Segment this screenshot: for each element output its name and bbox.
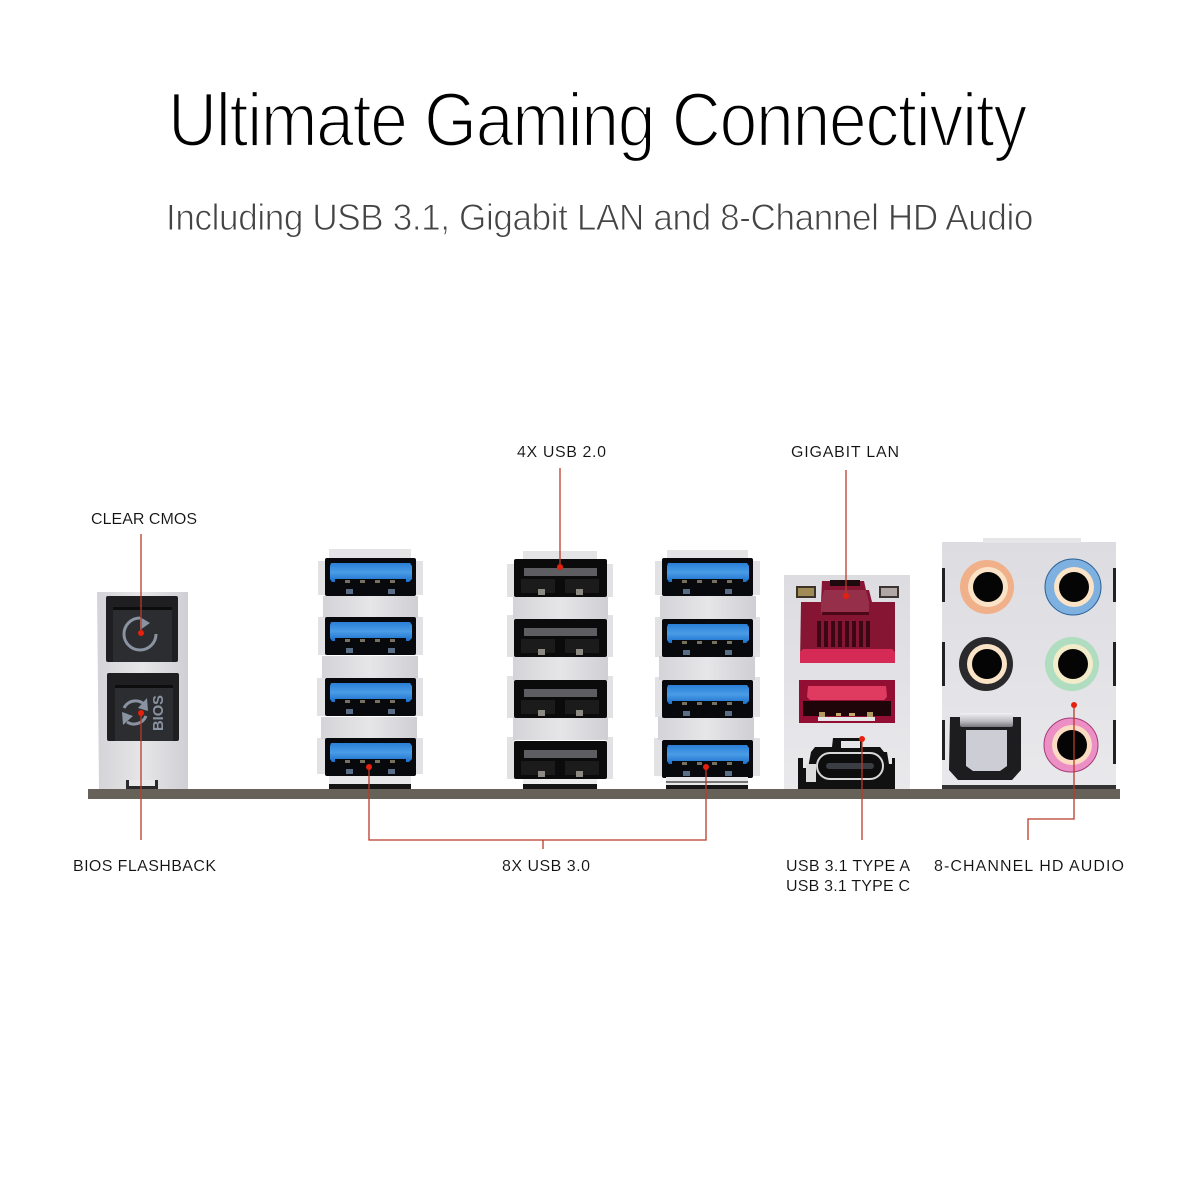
panel: USB 2.0 stack <box>507 551 613 789</box>
callout: BIOS flashback: BIOS FLASHBACK <box>73 858 216 875</box>
panel: clear CMOS and BIOS flashback buttons <box>97 592 188 789</box>
callout: 8X USB 3.0 <box>366 764 709 875</box>
callout: USB 3.1 type A and C: USB 3.1 TYPE C <box>786 878 910 895</box>
icon: red LAN port <box>800 580 895 663</box>
icon: BIOS flashback button: BIOS <box>150 695 167 731</box>
icon: optical S/PDIF port <box>949 713 1021 780</box>
callout: clear CMOS <box>91 511 197 636</box>
callout: 8-channel HD audio <box>934 702 1124 875</box>
icon: green audio jack <box>1045 637 1099 691</box>
callout: 8X USB 3.0: 8X USB 3.0 <box>502 858 590 875</box>
icon: clear CMOS button <box>106 596 178 662</box>
panel: left USB 3.0 stack <box>317 549 423 789</box>
icon: black audio jack <box>959 637 1013 691</box>
callout: BIOS flashback <box>73 710 216 875</box>
callout: 8-channel HD audio: 8-CHANNEL HD AUDIO <box>934 858 1124 875</box>
panel: right USB 3.0 stack <box>654 550 760 789</box>
panel: audio jack plate <box>942 538 1116 789</box>
callout: clear CMOS: CLEAR CMOS <box>91 511 197 528</box>
callout: gigabit LAN: GIGABIT LAN <box>791 444 899 461</box>
icon: LAN LEDs <box>796 586 899 598</box>
callout: 4X USB 2.0 <box>517 444 606 570</box>
icon: BIOS flashback button <box>107 673 179 741</box>
callout: USB 3.1 type A and C <box>786 736 910 895</box>
title: Ultimate Gaming Connectivity <box>168 78 1027 163</box>
icon: pink audio jack <box>1044 718 1098 772</box>
callout: 4X USB 2.0: 4X USB 2.0 <box>517 444 606 461</box>
icon: USB 3.1 Type-C port <box>798 738 895 789</box>
subtitle: Including USB 3.1, Gigabit LAN and 8-Channel HD Audio <box>166 197 1033 238</box>
icon: blue audio jack <box>1045 559 1101 615</box>
panel: LAN and USB 3.1 block <box>784 575 910 789</box>
callout: USB 3.1 type A and C: USB 3.1 TYPE A <box>786 858 910 875</box>
icon: orange audio jack <box>960 560 1014 614</box>
motherboard edge <box>88 789 1120 799</box>
icon: red USB 3.1 Type-A port <box>799 680 895 723</box>
callout: gigabit LAN <box>791 444 899 599</box>
